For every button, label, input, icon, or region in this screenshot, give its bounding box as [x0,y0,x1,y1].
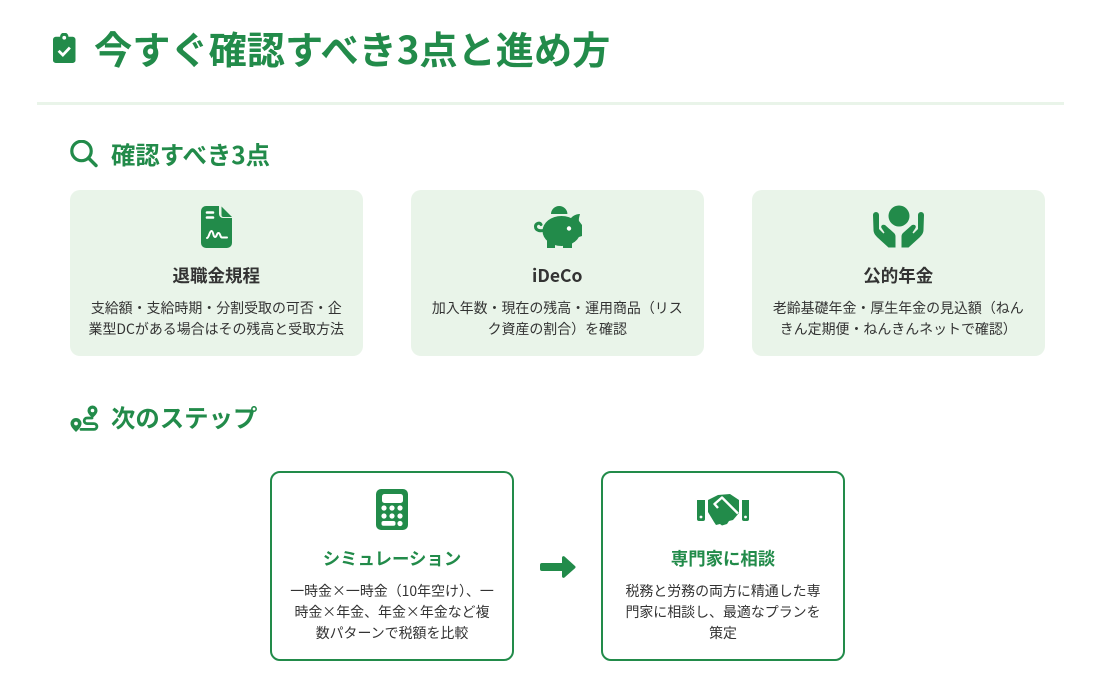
icon: handshake [697,494,749,526]
step description: 門家に相談し、最適なプランを [625,602,821,622]
card description: きん定期便・ねんきんネットで確認） [780,318,1017,338]
card title: 退職金規程 [172,263,260,288]
step description: 時金×年金、年金×年金など複 [294,602,490,622]
step title: シミュレーション [323,546,461,571]
icon: calculator [376,489,408,530]
step description [625,580,821,642]
card description: 業型DCがある場合はその残高と受取方法 [89,318,344,338]
card description [773,298,1024,338]
title underline [37,102,1064,105]
card description [89,298,344,338]
step description: 税務と労務の両方に精通した専 [625,580,821,600]
card description: 加入年数・現在の残高・運用商品（リス [432,298,683,318]
arrow [540,556,576,578]
heading: 次のステップ: 次のステップ [111,400,257,435]
icon: hands holding circle [873,206,924,248]
icon: piggy bank [534,206,582,248]
panel: シミュレーション [270,471,514,661]
icon: clipboard check [53,33,76,63]
step title: 専門家に相談 [671,546,775,571]
step description: 策定 [709,622,737,642]
step description: 一時金×一時金（10年空け）、一 [290,580,494,600]
panel: 退職金規程 [70,190,362,356]
icon: route [70,406,98,432]
icon: magnifier [70,140,98,168]
step description [290,580,494,642]
panel: 専門家に相談 [601,471,845,661]
card description [432,298,683,338]
heading: 確認すべき3点: 確認すべき3点 [111,137,270,172]
step description: 数パターンで税額を比較 [316,622,468,642]
icon: contract document [201,206,232,248]
card title: 公的年金 [863,263,933,288]
card description: 老齢基礎年金・厚生年金の見込額（ねん [773,298,1024,318]
panel: iDeCo [411,190,704,356]
panel: 公的年金 [752,190,1044,356]
card description: ク資産の割合）を確認 [488,318,627,338]
card description: 支給額・支給時期・分割受取の可否・企 [91,298,342,318]
card title: iDeCo [532,263,582,288]
title: 今すぐ確認すべき3点と進め方 [94,21,610,76]
